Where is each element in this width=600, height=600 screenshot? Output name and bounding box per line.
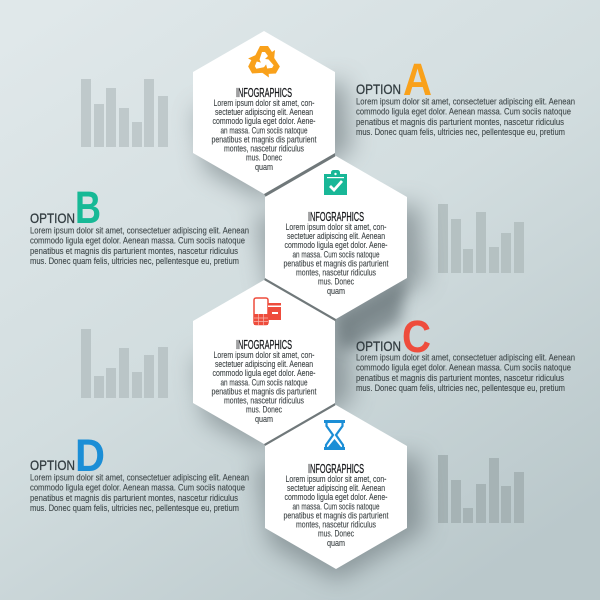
hexagon 2 text: quam — [327, 286, 345, 296]
hexagon 4 text: an massa. Cum sociis natoque — [292, 501, 380, 511]
hexagon 2 text: penatibus et magnis dis parturient — [284, 258, 389, 268]
bar chart: upper right — [438, 204, 524, 273]
hexagon 3 text: an massa. Cum sociis natoque — [220, 377, 308, 387]
option B: OPTION — [30, 211, 75, 226]
hexagon 2 — [265, 156, 407, 319]
hexagon 4 — [265, 405, 407, 569]
bar chart: top left — [81, 79, 168, 147]
hexagon 3 text — [212, 338, 317, 424]
hexagon 3 — [193, 280, 335, 444]
option D: OPTION — [30, 458, 75, 473]
hexagon 1 text: montes, nascetur ridiculus — [224, 144, 304, 154]
option D: penatibus et magnis dis parturient montes, nascetur ridiculus — [30, 492, 238, 503]
hexagon 1 text: sectetuer adipiscing elit. Aenean — [215, 107, 313, 117]
icon: clipboard — [324, 170, 347, 195]
hexagon 4 text: sectetuer adipiscing elit. Aenean — [287, 483, 385, 493]
option B: penatibus et magnis dis parturient montes, nascetur ridiculus — [30, 245, 238, 256]
hexagon 1 text: INFOGRAPHICS — [236, 86, 292, 100]
hexagon 2 text: an massa. Cum sociis natoque — [292, 249, 380, 259]
hexagon 1 text: penatibus et magnis dis parturient — [212, 134, 317, 144]
hexagon 2 text: Lorem ipsum dolor sit amet, con- — [286, 222, 386, 232]
option B: mus. Donec quam felis, ultricies nec, pellentesque eu, pretium — [30, 255, 239, 266]
hexagon 3 text: montes, nascetur ridiculus — [224, 396, 304, 406]
hexagon 3 text: mus. Donec — [246, 405, 282, 415]
hexagon 4 text: montes, nascetur ridiculus — [296, 520, 376, 530]
hexagon 1 text: Lorem ipsum dolor sit amet, con- — [214, 98, 314, 108]
hexagon 2 text: mus. Donec — [318, 277, 354, 287]
icon: hourglass — [324, 420, 345, 450]
hexagon 4 text — [284, 462, 389, 548]
hexagon 1 text — [212, 86, 317, 172]
option A: OPTION — [356, 82, 401, 97]
option C: C — [402, 311, 431, 362]
hexagon 2 text — [284, 210, 389, 296]
option D: Lorem ipsum dolor sit amet, consectetuer adipiscing elit. Aenean — [30, 472, 249, 482]
option D — [30, 430, 249, 513]
hexagon 3 text: Lorem ipsum dolor sit amet, con- — [214, 350, 314, 360]
hexagon 2 text: montes, nascetur ridiculus — [296, 268, 376, 278]
option D: D — [75, 430, 105, 481]
hexagon 1 text: an massa. Cum sociis natoque — [220, 125, 308, 135]
hexagon 4 text: commodo ligula eget dolor. Aene- — [284, 492, 388, 502]
option B: commodo ligula eget dolor. Aenean massa. Cum sociis natoque — [30, 235, 245, 246]
hexagon 3 text: commodo ligula eget dolor. Aene- — [212, 368, 316, 378]
hexagon 3 text: quam — [255, 414, 273, 424]
option B: B — [75, 182, 101, 233]
option B — [30, 182, 249, 266]
icon: phone and card — [254, 298, 281, 325]
option C: OPTION — [356, 339, 401, 354]
option C — [356, 311, 575, 393]
hexagon 1 text: quam — [255, 162, 273, 172]
hexagon 4 text: quam — [327, 538, 345, 548]
hexagon 1 — [193, 31, 335, 194]
hexagon 3 text: penatibus et magnis dis parturient — [212, 386, 317, 396]
hexagon 2 text: commodo ligula eget dolor. Aene- — [284, 240, 388, 250]
option D: mus. Donec quam felis, ultricies nec, pellentesque eu, pretium — [30, 502, 239, 513]
bar chart: lower left — [81, 329, 168, 398]
option B: Lorem ipsum dolor sit amet, consectetuer adipiscing elit. Aenean — [30, 224, 249, 236]
hexagon 2 text: sectetuer adipiscing elit. Aenean — [287, 231, 385, 241]
hexagon 3 text: sectetuer adipiscing elit. Aenean — [215, 359, 313, 369]
hexagon 4 text: penatibus et magnis dis parturient — [284, 510, 389, 520]
hexagon 1 text: commodo ligula eget dolor. Aene- — [212, 116, 316, 126]
option A: A — [403, 54, 432, 105]
hexagon 4 text: mus. Donec — [318, 529, 354, 539]
hexagon shadows — [195, 80, 425, 580]
option A — [356, 54, 575, 137]
bar chart: bottom right — [438, 455, 524, 523]
hexagon 4 text: Lorem ipsum dolor sit amet, con- — [286, 474, 386, 484]
hexagon 1 text: mus. Donec — [246, 153, 282, 163]
hexagon 2 text: INFOGRAPHICS — [308, 210, 364, 224]
hexagon 4 text: INFOGRAPHICS — [308, 462, 364, 476]
icon: recycle — [245, 46, 283, 80]
hexagon 3 text: INFOGRAPHICS — [236, 338, 292, 352]
option D: commodo ligula eget dolor. Aenean massa. Cum sociis natoque — [30, 482, 245, 493]
